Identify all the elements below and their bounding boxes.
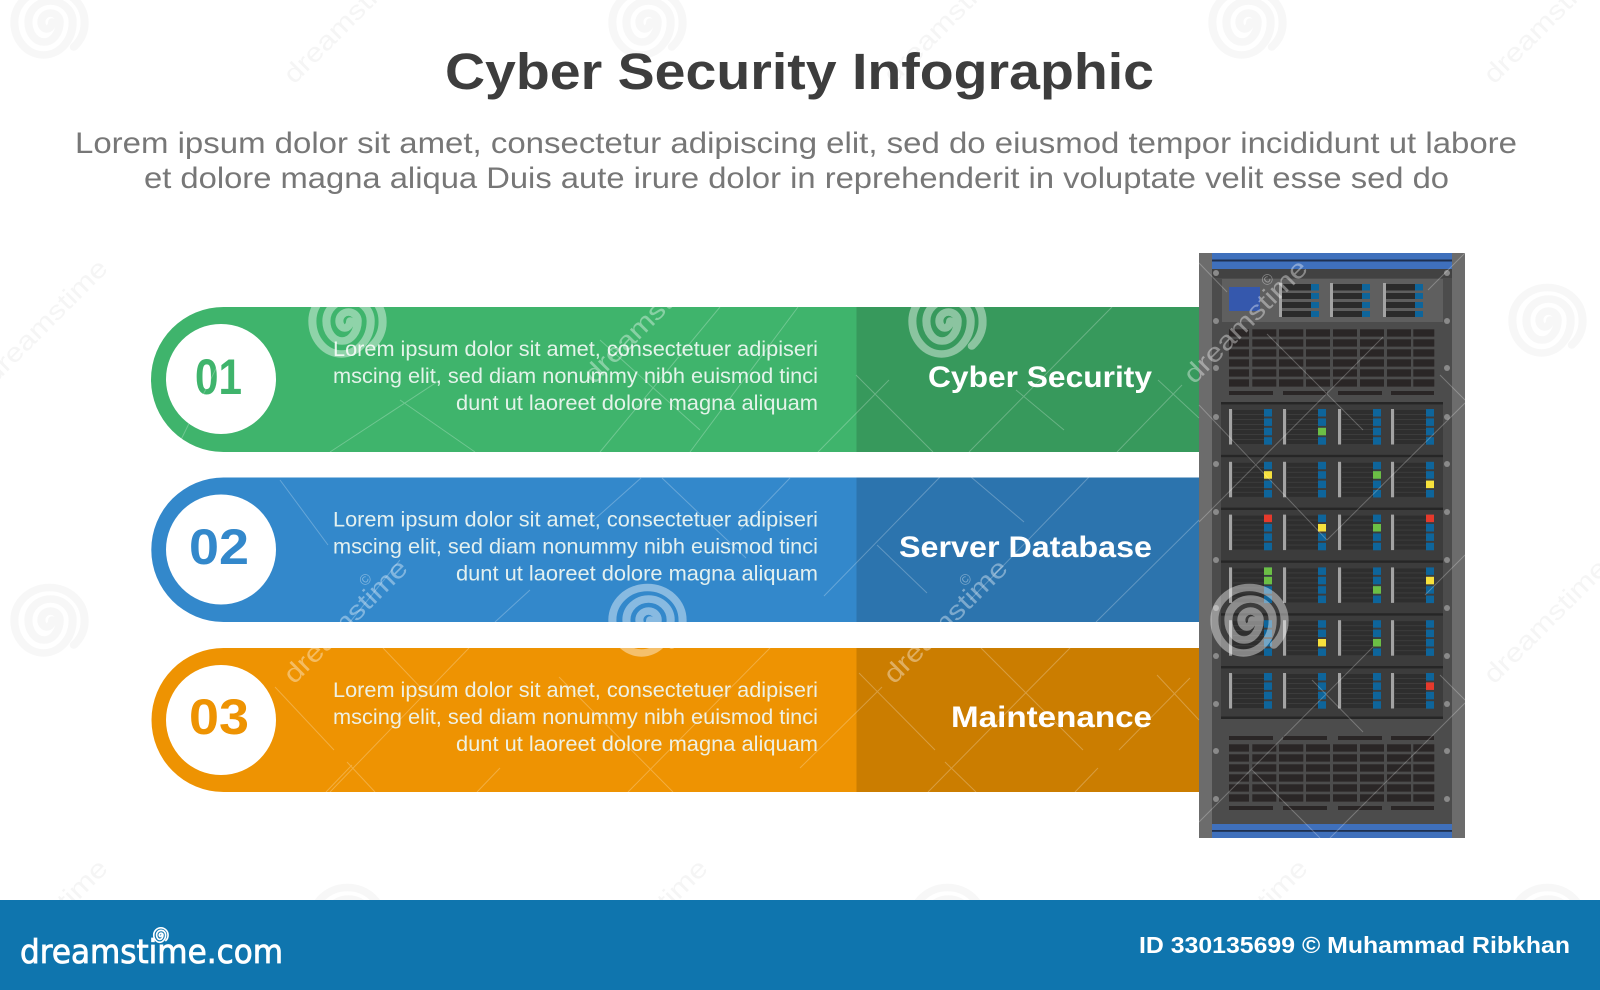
description: mscing elit, sed diam nonummy nibh euismod tinci [333, 705, 818, 729]
title: Cyber Security Infographic [445, 43, 1154, 100]
top blue band [1212, 253, 1452, 278]
description: Lorem ipsum dolor sit amet, consectetuer adipiseri [333, 508, 818, 532]
description: mscing elit, sed diam nonummy nibh euismod tinci [333, 364, 818, 388]
panel: 02 server database [151, 478, 1199, 622]
bottom blue band [1212, 824, 1452, 838]
bar background [152, 648, 1199, 792]
subtitle text block [75, 127, 1517, 195]
top vent grille [1229, 329, 1434, 395]
overlay watermark: © [1258, 270, 1278, 290]
overlay watermark: dreamstime [277, 553, 414, 689]
overlay watermark [175, 253, 1465, 838]
description [333, 337, 818, 415]
rack screws [1213, 270, 1450, 802]
number circle [166, 665, 276, 775]
number: 01 [195, 349, 242, 405]
panel: 03 maintenance [152, 648, 1199, 792]
image credit: ID 330135699 © Muhammad Ribkhan [1139, 932, 1570, 958]
top drive panel [1222, 279, 1443, 322]
description: Lorem ipsum dolor sit amet, consectetuer adipiseri [333, 337, 818, 361]
number circle [166, 494, 276, 604]
label: Cyber Security [928, 361, 1152, 394]
server units [1221, 402, 1443, 719]
footer logo: dreamstime.com [20, 932, 283, 971]
bar background [151, 478, 1199, 622]
bottom vent grille [1229, 736, 1434, 810]
description: dunt ut laoreet dolore magna aliquam [456, 732, 818, 756]
panel: 01 cyber security [151, 307, 1199, 452]
description: dunt ut laoreet dolore magna aliquam [456, 391, 818, 415]
description: Lorem ipsum dolor sit amet, consectetuer adipiseri [333, 678, 818, 702]
overlay watermark: dreamstime [877, 553, 1014, 689]
description: dunt ut laoreet dolore magna aliquam [456, 562, 818, 586]
subtitle text block: Lorem ipsum dolor sit amet, consectetur adipiscing elit, sed do eiusmod tempor incididunt ut labore [75, 127, 1517, 160]
overlay watermark: © [956, 570, 976, 590]
label section [856, 648, 1199, 792]
footer bar [0, 900, 1600, 990]
server rack illustration [1199, 253, 1465, 838]
description: mscing elit, sed diam nonummy nibh euismod tinci [333, 534, 818, 558]
overlay watermark: dreamstime [1177, 253, 1314, 389]
label: Server Database [899, 531, 1152, 564]
description [333, 508, 818, 586]
label: Maintenance [951, 701, 1152, 734]
label section [856, 478, 1199, 622]
faint background watermark: dreamstime [1477, 553, 1600, 689]
subtitle text block: et dolore magna aliqua Duis aute irure dolor in reprehenderit in voluptate velit esse sed do [144, 162, 1449, 195]
overlay watermark: dreamstime [577, 253, 714, 389]
description [333, 678, 818, 756]
faint background watermark: dreamstime [1177, 853, 1314, 989]
faint background watermark: dreamstime [577, 853, 714, 989]
bar background [151, 307, 1199, 452]
number: 03 [189, 689, 249, 745]
number circle [166, 324, 276, 434]
label section [856, 307, 1199, 452]
status lights [1264, 428, 1434, 690]
number: 02 [189, 519, 249, 575]
overlay watermark: © [356, 570, 376, 590]
